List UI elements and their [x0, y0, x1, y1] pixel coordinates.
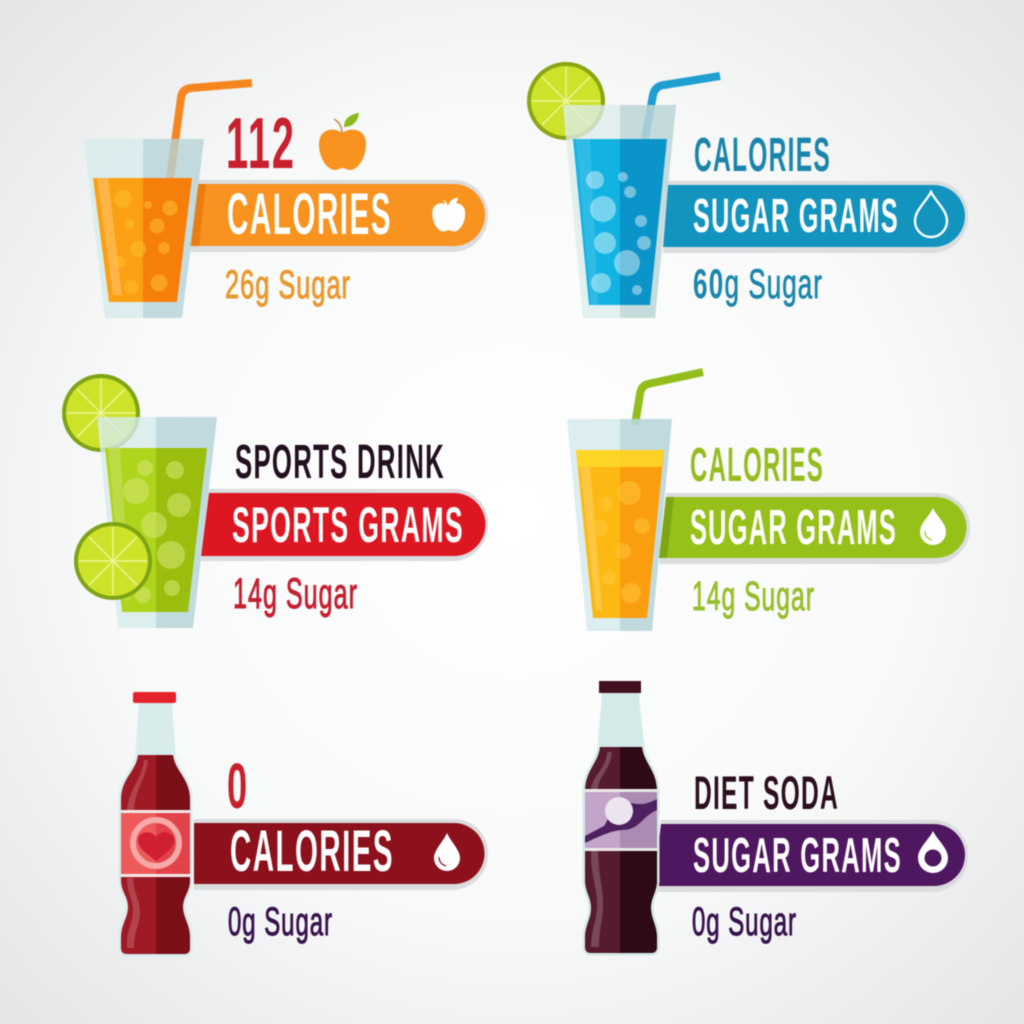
glass: green drink: [97, 417, 217, 628]
heading: sports drink: SPORTS DRINK: [235, 436, 445, 489]
icon: white apple: [432, 198, 465, 232]
sugar amount: 26g: 26g Sugar: [225, 263, 351, 307]
icon: orange apple: [319, 113, 366, 170]
straw: green: [635, 372, 703, 425]
bar label: sports grams: SPORTS GRAMS: [232, 497, 464, 553]
icon: white drop: [920, 508, 946, 545]
icon: lime slice: [527, 62, 605, 140]
bar: sugar grams blue: [663, 181, 968, 253]
icon: drop with ring: [918, 831, 948, 873]
heading: diet soda: DIET SODA: [694, 766, 839, 819]
panel: sports drink: [62, 374, 488, 628]
bar label: calories: CALORIES: [230, 819, 394, 884]
glass: yellow juice: [567, 419, 672, 631]
heading: calories green: CALORIES: [690, 439, 824, 492]
bar: sugar grams green: [659, 493, 970, 564]
bar: calories dark red: [194, 819, 488, 890]
straw: orange: [170, 83, 252, 178]
bottle: cola: [121, 692, 190, 954]
heading: calories blue: CALORIES: [694, 129, 831, 182]
sugar amount: 0g: 0g Sugar: [228, 900, 333, 944]
sugar amount: 60g: 60g Sugar: [693, 260, 823, 307]
number: 112: 112: [226, 104, 296, 184]
straw: blue: [645, 76, 720, 139]
icon: lime slice front: [74, 522, 152, 600]
bar label: calories: CALORIES: [227, 182, 392, 247]
icon: white drop: [434, 833, 460, 871]
panel: blue drink: [527, 62, 968, 318]
glass: blue drink: [563, 105, 676, 318]
bar: sports grams red: [201, 489, 488, 561]
panel: diet soda: [585, 681, 968, 953]
icon: outline drop: [915, 192, 947, 237]
panel: yellow juice: [567, 372, 970, 631]
bar: sugar grams purple: [654, 820, 968, 892]
bar: calories orange: [190, 180, 488, 252]
sugar amount: 14g green: 14g Sugar: [692, 573, 815, 619]
panel: cola: [121, 692, 488, 954]
sugar amount: 14g red: 14g Sugar: [233, 570, 358, 618]
number: 0: 0: [227, 750, 249, 822]
bottle: diet soda: [585, 681, 657, 953]
panel: orange juice: [84, 83, 488, 318]
icon: lime slice top: [62, 374, 140, 452]
glass: orange juice: [84, 139, 204, 318]
sugar amount: 0g: 0g Sugar: [692, 900, 797, 944]
